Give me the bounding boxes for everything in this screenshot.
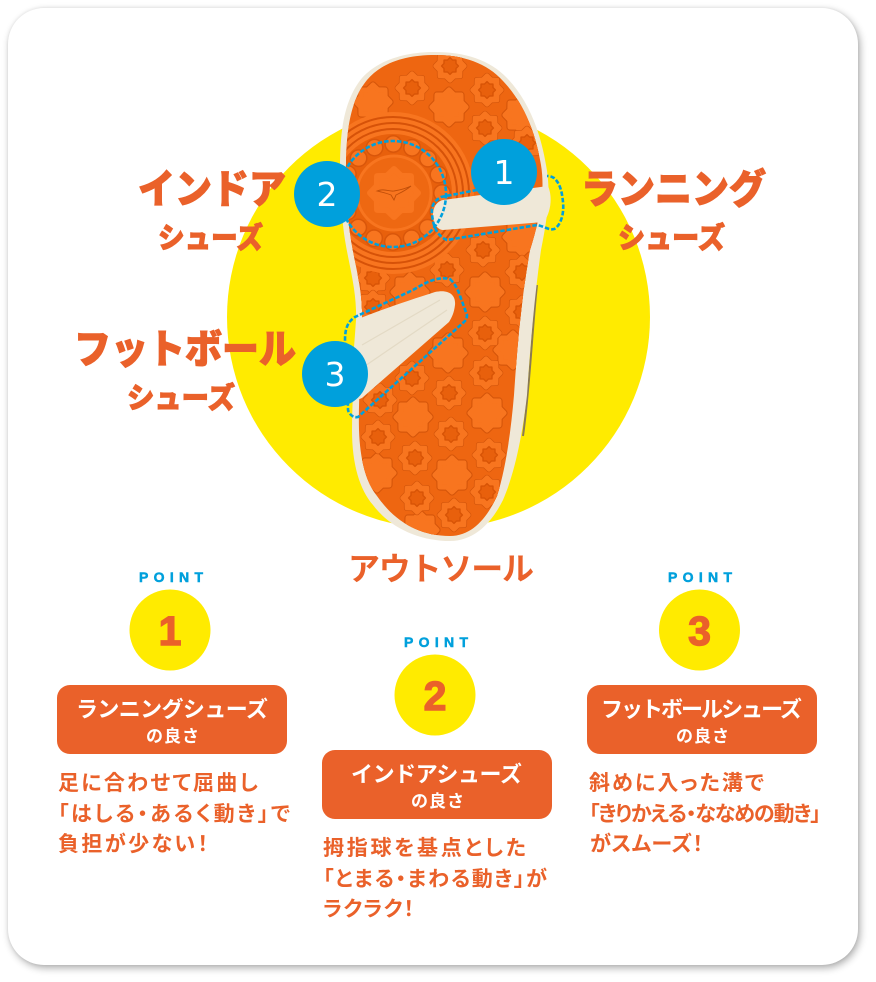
point 2 description: 「とまる・まわる動き」が — [323, 863, 547, 893]
point 3 description: がスムーズ！ — [590, 828, 703, 858]
point 2 pill: の良さ — [411, 787, 464, 812]
point 1 label: POINT — [139, 569, 203, 585]
point 1 description — [58, 767, 290, 858]
point 2 number: 2 — [424, 673, 446, 719]
heading: football shoes: フットボール — [74, 317, 296, 375]
point 3 description: 斜めに入った溝で — [589, 767, 764, 797]
point 1 number: 1 — [159, 608, 181, 654]
dashed callout: area 1 — [432, 176, 563, 240]
point 1 pill: の良さ — [146, 722, 199, 747]
heading: running shoes: ランニング — [581, 157, 766, 215]
point 3 number — [659, 590, 740, 670]
heading: indoor shoes — [138, 157, 286, 257]
shoe outsole photo illustration — [340, 52, 551, 541]
dashed callout: area 3 — [345, 278, 467, 417]
point 3 number: 3 — [688, 608, 711, 654]
point 2 description: ラクラク！ — [323, 893, 414, 923]
point 3 pill — [587, 685, 817, 754]
point 3 description: 「きりかえる・ななめの動き」 — [589, 798, 821, 828]
badge 2 — [294, 161, 360, 227]
point 2 pill — [322, 750, 552, 819]
heading: football shoes — [74, 317, 296, 417]
point 2 column — [322, 634, 552, 923]
heading: indoor shoes: インドア — [138, 157, 286, 215]
point 3 pill: の良さ — [676, 722, 729, 747]
point 2 label: POINT — [404, 634, 468, 650]
heading: running shoes — [581, 157, 766, 257]
heading: running shoes: シューズ — [618, 215, 725, 257]
point 1 description: 「はしる・あるく動き」で — [58, 798, 290, 828]
heading: indoor shoes: シューズ — [158, 215, 263, 257]
label: outsole: アウトソール — [348, 544, 534, 590]
point 2 description: 拇指球を基点とした — [323, 832, 526, 862]
badge 1 — [471, 139, 537, 205]
point 3 description — [589, 767, 821, 858]
heading: football shoes: シューズ — [127, 375, 235, 417]
badge 3: 3 — [324, 355, 346, 394]
badge 3 — [302, 341, 368, 407]
point 3 pill: フットボールシューズ — [601, 692, 802, 724]
point 2 description — [323, 832, 547, 923]
point 3 label: POINT — [668, 569, 732, 585]
badge 2: 2 — [316, 175, 338, 214]
dashed callout: area 2 — [340, 141, 446, 247]
point 1 column — [57, 569, 290, 858]
yellow background circle — [227, 106, 650, 528]
infographic artwork — [57, 52, 818, 918]
point 1 description: 足に合わせて屈曲し — [58, 767, 258, 797]
point 1 description: 負担が少ない！ — [58, 828, 208, 858]
point 1 pill: ランニングシューズ — [76, 692, 268, 724]
badge 1: 1 — [494, 153, 514, 192]
point 1 pill — [57, 685, 287, 754]
point 2 pill: インドアシューズ — [351, 757, 522, 789]
point 2 number — [394, 654, 476, 736]
point 3 column — [587, 569, 821, 858]
point 1 number — [130, 590, 210, 670]
